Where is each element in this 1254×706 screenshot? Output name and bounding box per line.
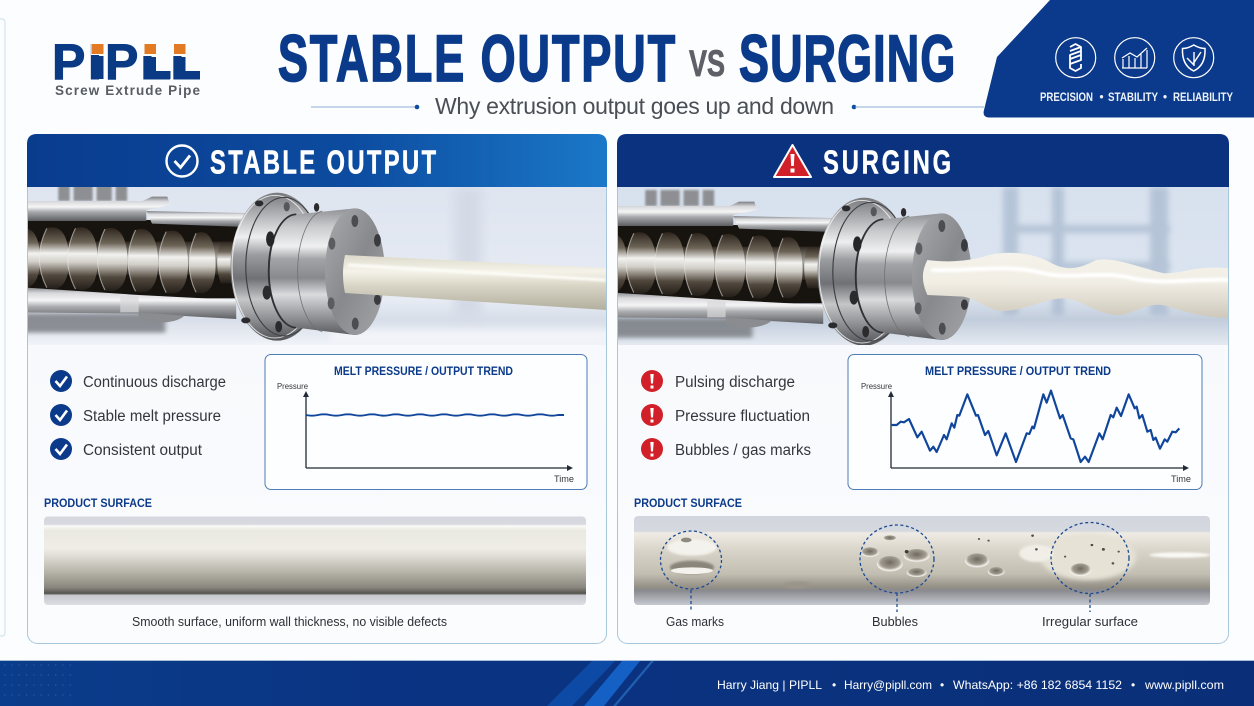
chart: stable pressure trend [265, 354, 587, 490]
item: pulsing discharge: Pulsing discharge [675, 374, 795, 391]
callout: bubbles [860, 525, 934, 629]
photo: surging extrusion [598, 187, 1229, 346]
panel header: stable output: STABLE OUTPUT [210, 145, 436, 182]
panel: stable output [11, 134, 610, 644]
surface defects [666, 534, 1210, 582]
icon: screw [1056, 38, 1096, 78]
item: stable melt pressure [50, 404, 221, 426]
contact line: Harry Jiang | PIPLL [717, 678, 822, 692]
contact line: WhatsApp: +86 182 6854 1152 [953, 678, 1122, 692]
contact line: • [1131, 678, 1135, 692]
item: bubbles and gas marks [641, 438, 811, 460]
item: consistent output [50, 438, 203, 460]
item: continuous discharge: Continuous discharge [83, 374, 226, 391]
title: VS [689, 43, 725, 84]
badge labels: • [1163, 92, 1167, 104]
product surface: defective pipe [634, 516, 1211, 605]
title [278, 21, 955, 95]
callout: irregular surface: Irregular surface [1042, 615, 1138, 629]
checklist: stable [50, 370, 226, 460]
title: SURGING [739, 21, 955, 95]
heading: product surface: PRODUCT SURFACE [44, 496, 152, 510]
chart: surging pressure trend [848, 354, 1202, 490]
wavy melt pipe [923, 253, 1229, 318]
badge labels: PRECISION [1040, 92, 1093, 104]
chart: surging pressure trend: Time [1171, 474, 1191, 484]
icon: shield [1174, 38, 1214, 78]
title: STABLE OUTPUT [278, 21, 675, 95]
contact line [717, 678, 1224, 692]
badge labels: RELIABILITY [1173, 92, 1233, 104]
contact line: • [940, 678, 944, 692]
panel header: stable output [27, 134, 607, 187]
badge labels: STABILITY [1108, 92, 1158, 104]
photo: stable extrusion [11, 185, 610, 346]
item: pressure fluctuation: Pressure fluctuation [675, 408, 810, 425]
logo: PIPLL Screw Extrude Pipe: PIPLL [52, 34, 201, 90]
product surface: smooth pipe [44, 516, 586, 605]
panel: surging [598, 134, 1229, 644]
heading: product surface: PRODUCT SURFACE [634, 496, 742, 510]
callout: gas marks [660, 531, 724, 629]
chart: stable pressure trend: Pressure [277, 381, 308, 391]
caption: smooth surface: Smooth surface, uniform wall thickness, no visible defects [132, 615, 447, 629]
badge labels: • [1100, 92, 1104, 104]
panel header: surging [617, 134, 1229, 187]
panel header: surging: SURGING [823, 145, 951, 182]
item: consistent output: Consistent output [83, 442, 203, 459]
callout: gas marks: Gas marks [666, 615, 724, 629]
item: bubbles and gas marks: Bubbles / gas marks [675, 442, 811, 459]
badge: precision stability reliability [984, 0, 1254, 118]
item: continuous discharge [50, 370, 226, 392]
item: pulsing discharge [641, 370, 795, 392]
callout: irregular surface [1042, 522, 1138, 629]
logo: PIPLL Screw Extrude Pipe: Screw Extrude Pipe [55, 83, 200, 98]
subtitle with rules [311, 93, 984, 119]
footer bar [0, 660, 1254, 706]
chart: surging pressure trend: MELT PRESSURE / OUTPUT TREND [925, 364, 1111, 378]
chart: surging pressure trend: Pressure [861, 381, 892, 391]
contact line: www.pipll.com [1144, 678, 1224, 692]
chart: stable pressure trend: MELT PRESSURE / OUTPUT TREND [334, 364, 513, 378]
icon: chart [1115, 38, 1155, 78]
item: pressure fluctuation [641, 404, 810, 426]
item: stable melt pressure: Stable melt pressure [83, 408, 221, 425]
contact line: Harry@pipll.com [844, 678, 932, 692]
badge labels [1040, 92, 1233, 104]
subtitle with rules: Why extrusion output goes up and down [435, 93, 834, 119]
left edge frame [0, 19, 5, 636]
checklist: surging [641, 370, 811, 460]
callout: bubbles: Bubbles [872, 615, 918, 629]
chart: stable pressure trend: Time [554, 474, 574, 484]
contact line: • [832, 678, 836, 692]
